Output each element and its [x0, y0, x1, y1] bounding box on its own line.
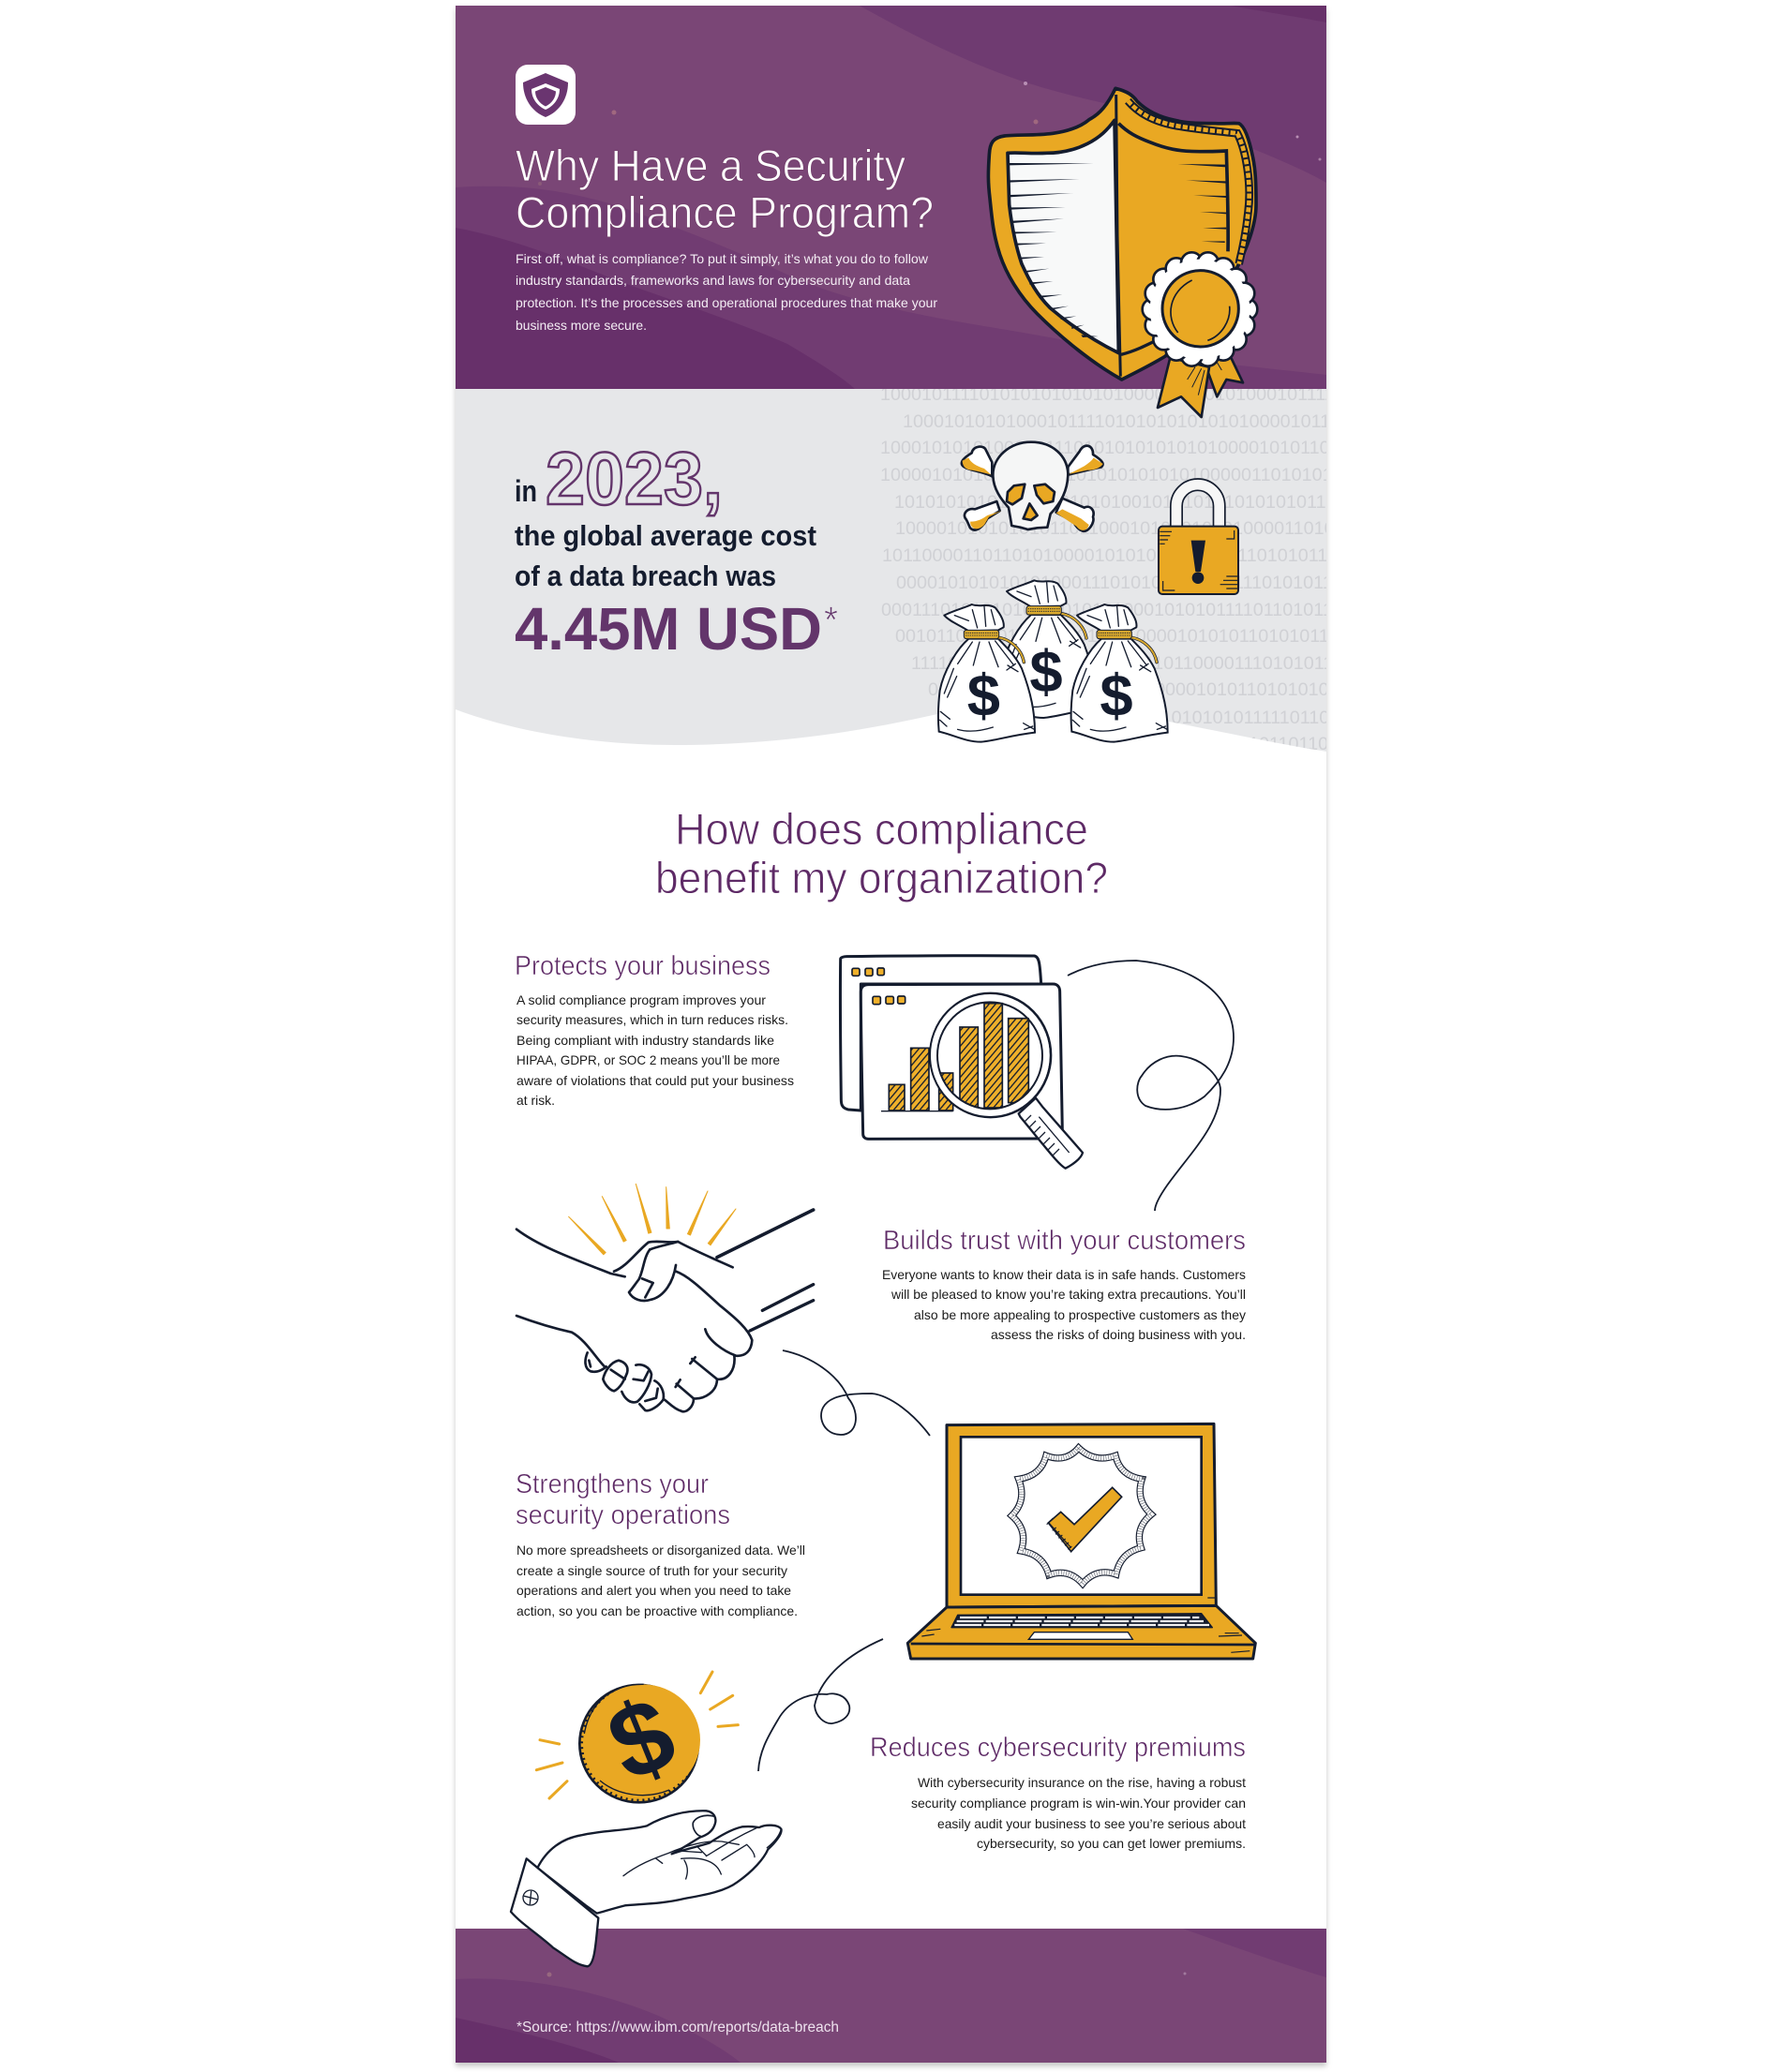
binary background: 1000101111010101010101010000110101010001011110 [880, 384, 1345, 405]
title: Compliance Program? [516, 187, 934, 237]
bar chart [889, 1004, 1028, 1111]
block: reduces cybersecurity premiums: easily audit your business to see you’re serious about [937, 1816, 1246, 1831]
binary background: 10001010101000101110101010101010100001010110101 [880, 438, 1361, 458]
stat text: description: of a data breach was [515, 559, 776, 592]
binary background: 100010101010001011110101010101010100001011010 [903, 411, 1361, 432]
squiggle arrow 3 [758, 1639, 883, 1771]
illustration: handshake [516, 1184, 814, 1411]
illustration: laptop with check badge [907, 1424, 1255, 1659]
block: strengthens your security operations: Strengthens your [516, 1469, 709, 1499]
icon: money bags [938, 580, 1168, 742]
heading: how does compliance benefit: benefit my organization? [655, 853, 1108, 902]
icon: padlock [1159, 484, 1238, 594]
block: protects your business [515, 951, 794, 1108]
binary background: 1010101010100101010101001010101010101010110101 [894, 492, 1368, 513]
icon: light rays [569, 1184, 736, 1255]
intro text: business more secure. [516, 318, 647, 333]
infographic [453, 6, 1329, 2069]
illustration: coin and open hand [511, 1672, 782, 1966]
money bag centre [1001, 580, 1098, 718]
stat text: in 2023: in [515, 474, 537, 508]
block: builds trust: assess the risks of doing business with you. [991, 1327, 1246, 1342]
block: builds trust [882, 1226, 1246, 1342]
stat text: description [515, 519, 816, 592]
block: protects your business: A solid compliance program improves your [516, 992, 766, 1007]
binary background: 0000101010101010001110101010101001110101011010 [896, 573, 1364, 593]
block: protects your business: security measures, which in turn reduces risks. [516, 1012, 788, 1027]
block: strengthens your security operations: No more spreadsheets or disorganized data. We’ll [516, 1543, 805, 1558]
page body [456, 6, 1326, 2063]
binary background: 10101011101011010101011111011010 [1031, 708, 1350, 728]
icon: logo shield [516, 65, 576, 125]
binary background: 10110000110110101000010101010101001110101011010 [882, 545, 1358, 566]
laptop trackpad [1028, 1632, 1132, 1639]
illustrations: skull, padlock and bags [938, 442, 1238, 742]
rosette ribbon [1158, 354, 1243, 417]
intro text: industry standards, frameworks and laws for cybersecurity and data [516, 273, 910, 288]
block: protects your business: HIPAA, GDPR, or SOC 2 means you’ll be more [516, 1052, 780, 1067]
panel: footer [456, 1929, 1326, 2063]
block: strengthens your security operations: action, so you can be proactive with compliance. [516, 1603, 798, 1618]
icon: dollar coin: $ [592, 1675, 690, 1804]
binary background: 0010110101010101110111010000101010110101011010 [895, 626, 1360, 647]
illustration: windows with magnified bar chart [840, 956, 1083, 1169]
stat number: * [824, 600, 838, 641]
binary background: 10101010101010110110101 [1125, 734, 1359, 754]
block: protects your business: at risk. [516, 1093, 555, 1108]
money bag left: $ [967, 663, 1000, 729]
panel: hero header [456, 6, 1326, 389]
stat text: in 2023: 2023, [546, 437, 723, 520]
block: builds trust: Builds trust with your customers [883, 1226, 1246, 1256]
panel: grey statistic section [456, 384, 1379, 754]
block: reduces cybersecurity premiums: cybersecurity, so you can get lower premiums. [977, 1836, 1246, 1851]
block: reduces cybersecurity premiums: security compliance program is win-win.Your provider can [911, 1796, 1246, 1811]
binary background: 1000010101010101101100010101010101000011010101 [895, 518, 1366, 539]
icon: check badge [1011, 1448, 1151, 1584]
binary background: 00011101010101011101010100010101011110110101101 [881, 600, 1354, 620]
stat text: description: the global average cost [515, 519, 816, 552]
laptop keyboard [951, 1614, 1212, 1628]
squiggle arrow 1 [1068, 961, 1234, 1211]
money bag right: $ [1100, 663, 1133, 729]
binary background [881, 389, 1326, 750]
block: protects your business: aware of violations that could put your business [516, 1073, 794, 1088]
title [516, 141, 934, 237]
block: strengthens your security operations: security operations [516, 1500, 730, 1530]
binary background: 1111010101010101010101011011000011101010110 [911, 653, 1343, 674]
title: Why Have a Security [516, 141, 905, 190]
block: protects your business: Protects your business [515, 951, 771, 981]
icon: coin rays [536, 1672, 738, 1798]
rosette medal [1143, 252, 1257, 366]
illustration: shield with rosette [988, 88, 1257, 417]
heading: how does compliance benefit [655, 804, 1108, 902]
block: strengthens your security operations [516, 1469, 805, 1618]
icon: open hand [511, 1811, 782, 1966]
block: strengthens your security operations: operations and alert you when you need to take [516, 1583, 791, 1598]
panel shadow [456, 9, 1326, 2066]
stat number: 4.45M USD [515, 595, 822, 663]
icon: magnifying glass [930, 993, 1083, 1169]
binary background: 01010101010101010101010000101011010101011010 [928, 679, 1379, 700]
squiggle arrow 2 [783, 1350, 930, 1436]
heading: how does compliance benefit: How does compliance [675, 804, 1088, 854]
intro text [516, 251, 937, 333]
block: strengthens your security operations: create a single source of truth for your security [516, 1563, 787, 1578]
intro text: protection. It’s the processes and operational procedures that make your [516, 295, 937, 310]
intro text: First off, what is compliance? To put it simply, it’s what you do to follow [516, 251, 929, 266]
block: builds trust: also be more appealing to prospective customers as they [914, 1307, 1246, 1322]
block: builds trust: will be pleased to know you’re taking extra precautions. You’ll [890, 1287, 1246, 1302]
block: reduces cybersecurity premiums [870, 1733, 1246, 1851]
block: builds trust: Everyone wants to know their data is in safe hands. Customers [882, 1267, 1246, 1282]
source note: *Source: https://www.ibm.com/reports/data-breach [516, 2020, 839, 2035]
money bag right [1071, 604, 1168, 742]
money bag centre: $ [1029, 639, 1063, 705]
block: protects your business: Being compliant with industry standards like [516, 1033, 774, 1048]
block: reduces cybersecurity premiums: With cybersecurity insurance on the rise, having a robust [918, 1775, 1246, 1790]
icon: skull and crossbones [962, 442, 1103, 531]
money bag left [938, 604, 1035, 742]
binary background: 10000101010100101010101010101010000011010101010 [880, 465, 1364, 485]
block: reduces cybersecurity premiums: Reduces cybersecurity premiums [870, 1733, 1246, 1763]
